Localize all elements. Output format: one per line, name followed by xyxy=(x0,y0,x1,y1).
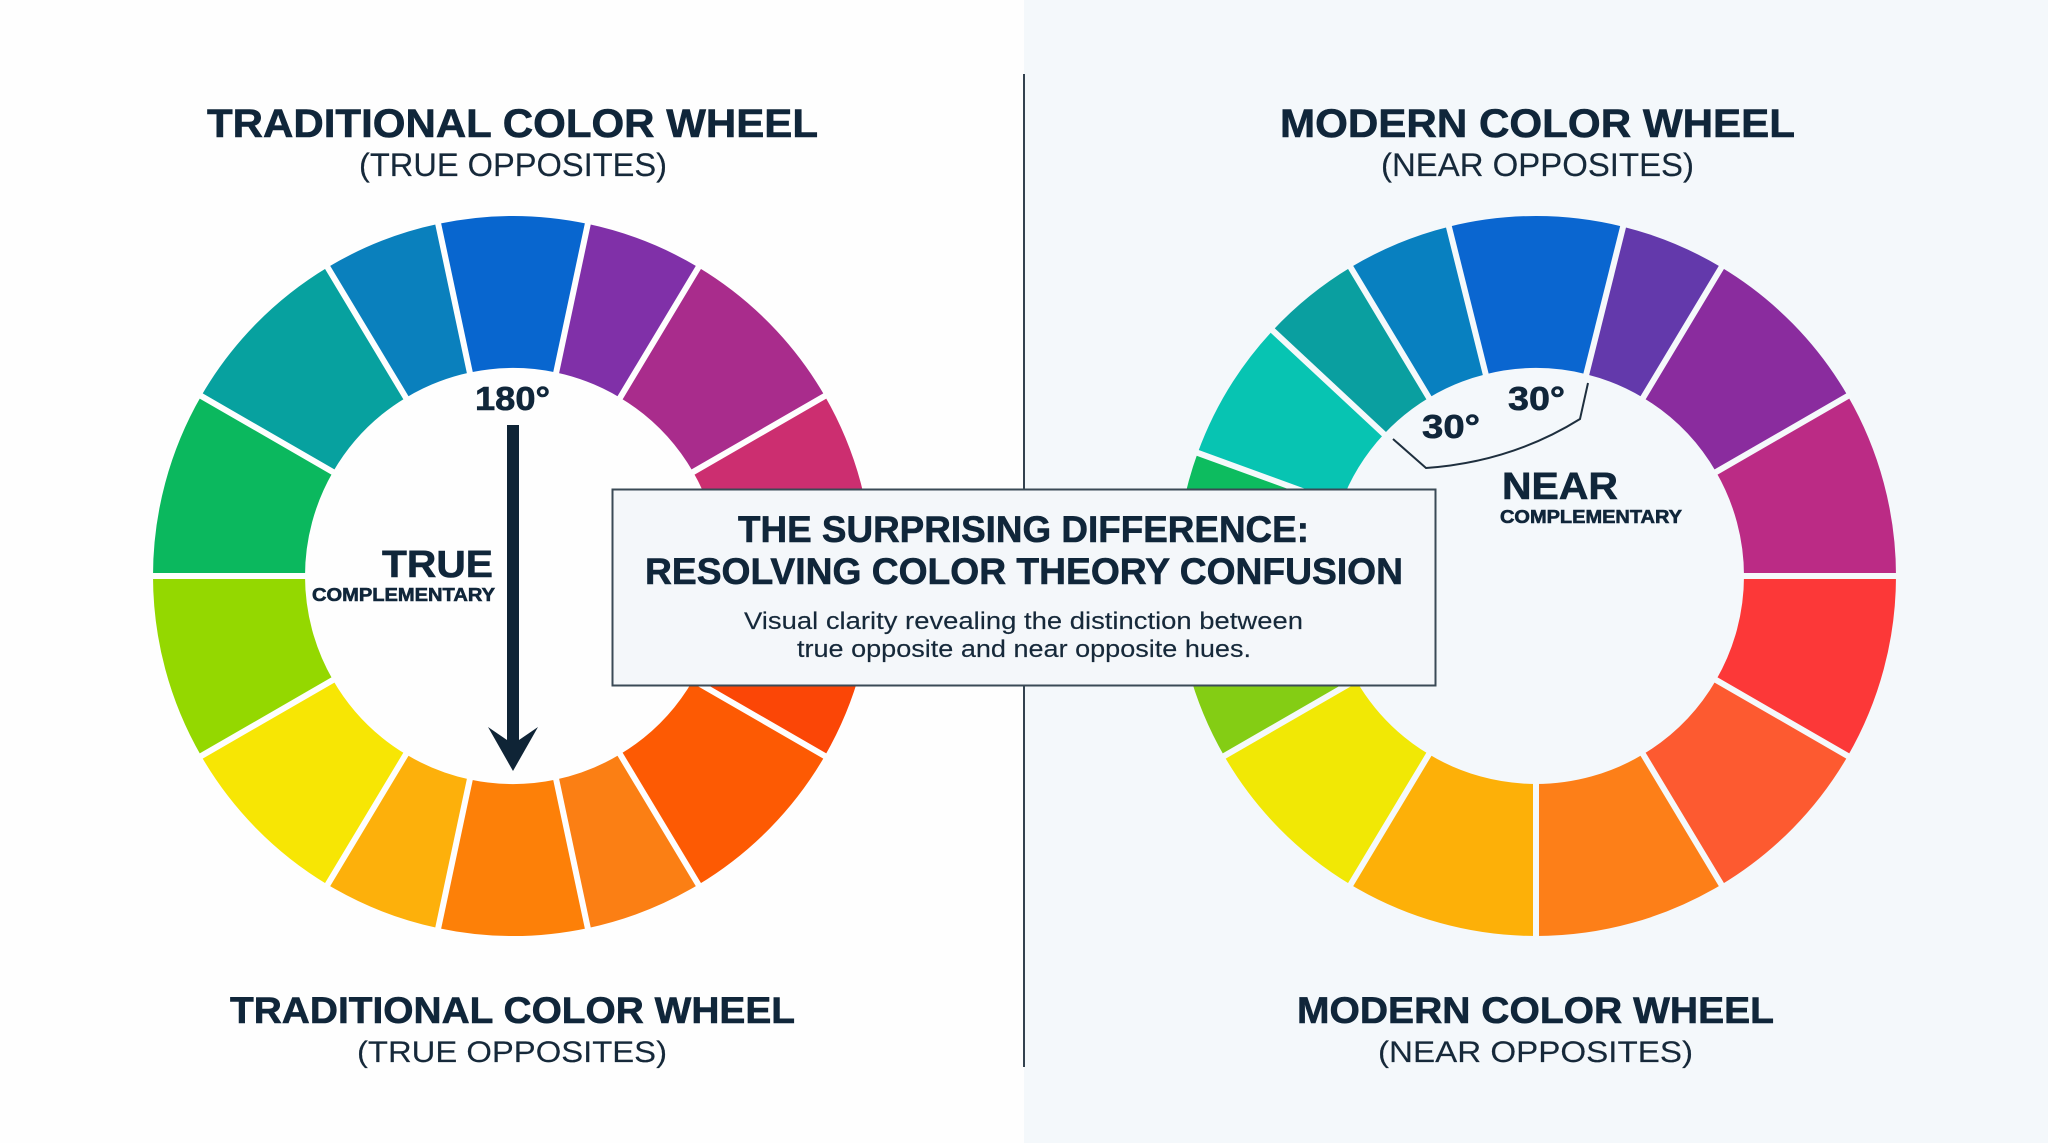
heading: traditional color wheel top: TRADITIONAL COLOR WHEEL xyxy=(207,102,818,146)
subtitle: visual clarity text: true opposite and near opposite hues. xyxy=(797,636,1251,663)
title: the surprising difference: THE SURPRISING DIFFERENCE: xyxy=(738,509,1309,550)
segment: blue xyxy=(438,216,588,372)
label: true complementary: COMPLEMENTARY xyxy=(312,585,495,605)
segment: deep orange xyxy=(556,754,698,928)
segment: orange xyxy=(1536,754,1721,936)
label: 30 degrees lower: 30° xyxy=(1422,408,1480,445)
label: true complementary xyxy=(312,544,495,605)
title: the surprising difference: RESOLVING COLOR THEORY CONFUSION xyxy=(645,551,1403,592)
heading: traditional color wheel bottom: (TRUE OPPOSITES) xyxy=(357,1036,667,1069)
segment: red-orange xyxy=(1643,680,1848,885)
segment: yellow xyxy=(1224,680,1429,885)
heading: modern color wheel bottom xyxy=(1297,990,1774,1069)
segment: red xyxy=(1716,576,1896,756)
segment: amber xyxy=(1351,754,1536,936)
heading: modern color wheel top: MODERN COLOR WHEEL xyxy=(1280,102,1795,146)
segment: purple xyxy=(1643,267,1848,472)
segment: magenta xyxy=(1716,396,1896,576)
heading: traditional color wheel top xyxy=(207,102,818,183)
heading: modern color wheel bottom: MODERN COLOR WHEEL xyxy=(1297,990,1774,1031)
segment: red-violet xyxy=(620,267,825,472)
segment: crimson xyxy=(693,396,873,576)
heading: modern color wheel top: (NEAR OPPOSITES) xyxy=(1381,147,1694,183)
label: 30 degrees upper: 30° xyxy=(1508,380,1565,417)
segment: red-orange xyxy=(620,680,825,885)
segment: lime xyxy=(1176,576,1356,756)
heading: traditional color wheel bottom: TRADITIONAL COLOR WHEEL xyxy=(230,990,795,1031)
subtitle: visual clarity text: Visual clarity revealing the distinction between xyxy=(744,608,1303,635)
segment: green xyxy=(1176,453,1340,576)
segment: cerulean xyxy=(328,224,470,398)
segment: yellow xyxy=(201,680,406,885)
chart: traditional color wheel xyxy=(153,216,873,936)
label: near complementary: COMPLEMENTARY xyxy=(1500,507,1682,527)
label: near complementary: NEAR xyxy=(1502,466,1618,508)
panel: central title box xyxy=(612,490,1436,686)
label: near complementary xyxy=(1500,466,1682,527)
chart: modern color wheel xyxy=(1176,216,1896,936)
segment: red xyxy=(693,576,873,756)
arrow: 180 degree opposite xyxy=(488,425,538,771)
segment: green xyxy=(153,396,333,576)
segment: orange xyxy=(438,780,588,936)
title: the surprising difference xyxy=(645,509,1403,592)
heading: modern color wheel bottom: (NEAR OPPOSITES) xyxy=(1378,1036,1693,1069)
label: 180 degrees: 180° xyxy=(475,380,550,417)
heading: modern color wheel top xyxy=(1280,102,1795,183)
heading: traditional color wheel bottom xyxy=(230,990,795,1069)
segment: cerulean xyxy=(1351,227,1486,398)
segment: lime xyxy=(153,576,333,756)
segment: amber xyxy=(328,754,470,928)
segment: turquoise xyxy=(1198,330,1384,505)
heading: traditional color wheel top: (TRUE OPPOSITES) xyxy=(359,147,667,183)
subtitle: visual clarity text xyxy=(744,608,1303,663)
segment: indigo xyxy=(1586,227,1721,398)
segment: violet xyxy=(556,224,698,398)
bracket: near complementary span xyxy=(1393,383,1588,468)
segment: teal xyxy=(201,267,406,472)
segment: blue xyxy=(1449,216,1623,374)
segment: teal xyxy=(1273,267,1429,434)
label: true complementary: TRUE xyxy=(382,544,493,586)
